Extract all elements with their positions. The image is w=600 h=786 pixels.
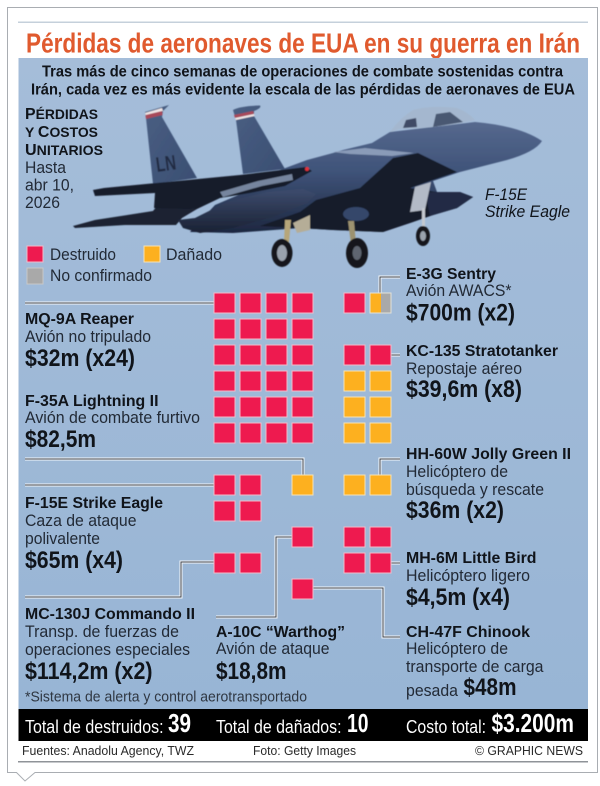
label: MC-130J Commando II [25, 606, 195, 685]
totals bar: Total de dañados: [216, 717, 342, 737]
label: KC-135 Stratotanker: Repostaje aéreo [406, 360, 522, 378]
HH-60W squares [344, 475, 391, 495]
label: HH-60W Jolly Green II: Helicóptero de [406, 463, 508, 481]
label: MH-6M Little Bird: Helicóptero ligero [406, 567, 530, 585]
lower tailplane [73, 206, 197, 228]
photo: F-15E jet [73, 105, 542, 268]
heading: losses and costs: Y COSTOS [25, 124, 98, 141]
label: F-15E Strike Eagle: $65m (x4) [25, 547, 123, 574]
KC-135 squares [344, 345, 391, 443]
heading: losses and costs: Hasta [25, 159, 67, 177]
totals bar: 39 [168, 708, 191, 738]
label: KC-135 Stratotanker: KC-135 Stratotanker [406, 343, 558, 360]
canopy [390, 107, 475, 132]
E-3G squares [344, 293, 391, 313]
right tail fin [233, 106, 285, 174]
MQ-9A and F-35A squares [214, 293, 313, 495]
totals bar: $3.200m [492, 708, 574, 738]
wing light [305, 167, 309, 171]
label: F-35A Lightning II: Avión de combate furtivo [25, 409, 200, 427]
totals bar: 10 [347, 708, 368, 738]
label: CH-47F Chinook: Helicóptero de [406, 640, 508, 658]
canopy crew [403, 112, 463, 128]
footer credits: © GRAPHIC NEWS [475, 743, 583, 758]
heading: losses and costs: PÉRDIDAS [25, 106, 98, 123]
label: E-3G Sentry: E-3G Sentry [406, 266, 496, 283]
second fuel tank [425, 192, 473, 216]
legend [27, 246, 222, 285]
subtitle [31, 64, 575, 98]
right fin stripes [234, 111, 254, 120]
footer credits [22, 743, 583, 758]
left fin code: LN [154, 151, 178, 177]
label: F-15E Strike Eagle: F-15E Strike Eagle [25, 495, 163, 512]
leader lines [25, 277, 400, 637]
label: F-35A Lightning II: F-35A Lightning II [25, 393, 158, 410]
label: MC-130J Commando II: $114,2m (x2) [25, 658, 152, 685]
label: CH-47F Chinook: $48m [464, 674, 516, 701]
nose strut [422, 208, 425, 229]
gear door [293, 215, 310, 233]
F-15E squares [214, 475, 261, 521]
MH-6M squares [344, 527, 391, 573]
footer credits: Foto: Getty Images [253, 743, 356, 758]
wheel right [346, 238, 368, 268]
label: HH-60W Jolly Green II: $36m (x2) [406, 497, 504, 524]
main gear strut left [284, 220, 291, 242]
label: E-3G Sentry [406, 266, 515, 326]
label: MH-6M Little Bird [406, 550, 536, 611]
label: MH-6M Little Bird: $4,5m (x4) [406, 584, 510, 611]
wheel well pod [343, 207, 369, 221]
label: F-15E Strike Eagle [25, 495, 163, 574]
wheel left [272, 239, 292, 267]
label: HH-60W Jolly Green II: HH-60W Jolly Green II [406, 446, 571, 463]
nose gear door [410, 182, 431, 212]
MC-130J squares [214, 553, 261, 573]
label: CH-47F Chinook: pesada [406, 682, 459, 700]
label: MC-130J Commando II: MC-130J Commando II [25, 606, 195, 623]
legend: Dañado [166, 246, 222, 264]
main wing [93, 167, 312, 209]
conformal fuel tank [178, 189, 316, 233]
fuselage [190, 122, 542, 233]
label: HH-60W Jolly Green II [406, 446, 571, 524]
belly shadow [260, 188, 473, 232]
label: MQ-9A Reaper [25, 311, 151, 372]
label: F-15E Strike Eagle: polivalente [25, 530, 100, 548]
left fin stripes [145, 108, 163, 119]
subtitle: Tras más de cinco semanas de operaciones de combate sostenidas contra [42, 64, 563, 80]
heading: losses and costs: 2026 [25, 194, 60, 212]
label: MC-130J Commando II: Transp. de fuerzas de [25, 623, 179, 641]
heading: losses and costs: UNITARIOS [25, 142, 103, 159]
label: MC-130J Commando II: operaciones especiales [25, 641, 190, 659]
A-10C square [292, 527, 313, 547]
panel: blue background [18, 58, 588, 709]
label: F-35A Lightning II [25, 393, 200, 453]
label: MQ-9A Reaper: Avión no tripulado [25, 328, 151, 346]
label: CH-47F Chinook [406, 624, 544, 701]
photo caption [485, 186, 570, 221]
label: MQ-9A Reaper: $32m (x24) [25, 345, 135, 372]
missile [220, 174, 293, 197]
intake dark region [360, 153, 457, 188]
label: A-10C Warthog: Avión de ataque [216, 640, 330, 658]
label: HH-60W Jolly Green II: búsqueda y rescate [406, 481, 544, 499]
label: F-35A Lightning II: $82,5m [25, 426, 96, 453]
photo caption: Strike Eagle [485, 203, 570, 221]
label: E-3G Sentry: Avión AWACS* [406, 282, 512, 300]
label: CH-47F Chinook: CH-47F Chinook [406, 624, 530, 641]
nose wheel [416, 226, 430, 246]
label: A-10C Warthog: A-10C “Warthog” [216, 624, 345, 641]
label: CH-47F Chinook: transporte de carga [406, 658, 544, 676]
CH-47F square [292, 579, 313, 599]
label: MQ-9A Reaper: MQ-9A Reaper [25, 311, 134, 328]
bottom rule [18, 761, 588, 762]
footnote: *Sistema de alerta y control aerotransportado [25, 690, 307, 706]
main gear strut right [348, 221, 356, 244]
label: A-10C Warthog: $18,8m [216, 658, 286, 685]
label: E-3G Sentry: $700m (x2) [406, 300, 515, 326]
label: KC-135 Stratotanker: $39,6m (x8) [406, 376, 522, 403]
label: KC-135 Stratotanker [406, 343, 558, 403]
heading: losses and costs: abr 10, [25, 176, 74, 194]
label: A-10C Warthog [216, 624, 345, 685]
legend: Destruido [50, 246, 116, 264]
heading: losses and costs [25, 106, 103, 212]
label: MH-6M Little Bird: MH-6M Little Bird [406, 550, 536, 567]
top rule [18, 22, 588, 23]
squares: aircraft pictogram [214, 293, 391, 599]
wing glove highlight [333, 148, 414, 156]
footer credits: Fuentes: Anadolu Agency, TWZ [22, 743, 194, 758]
label: F-15E Strike Eagle: Caza de ataque [25, 512, 136, 530]
left tail fin [145, 105, 197, 184]
photo caption: F-15E [485, 186, 528, 204]
totals bar: Total de destruidos: [25, 717, 164, 737]
totals bar [18, 708, 588, 741]
totals bar: Costo total: [406, 717, 486, 737]
legend: No confirmado [50, 267, 152, 285]
